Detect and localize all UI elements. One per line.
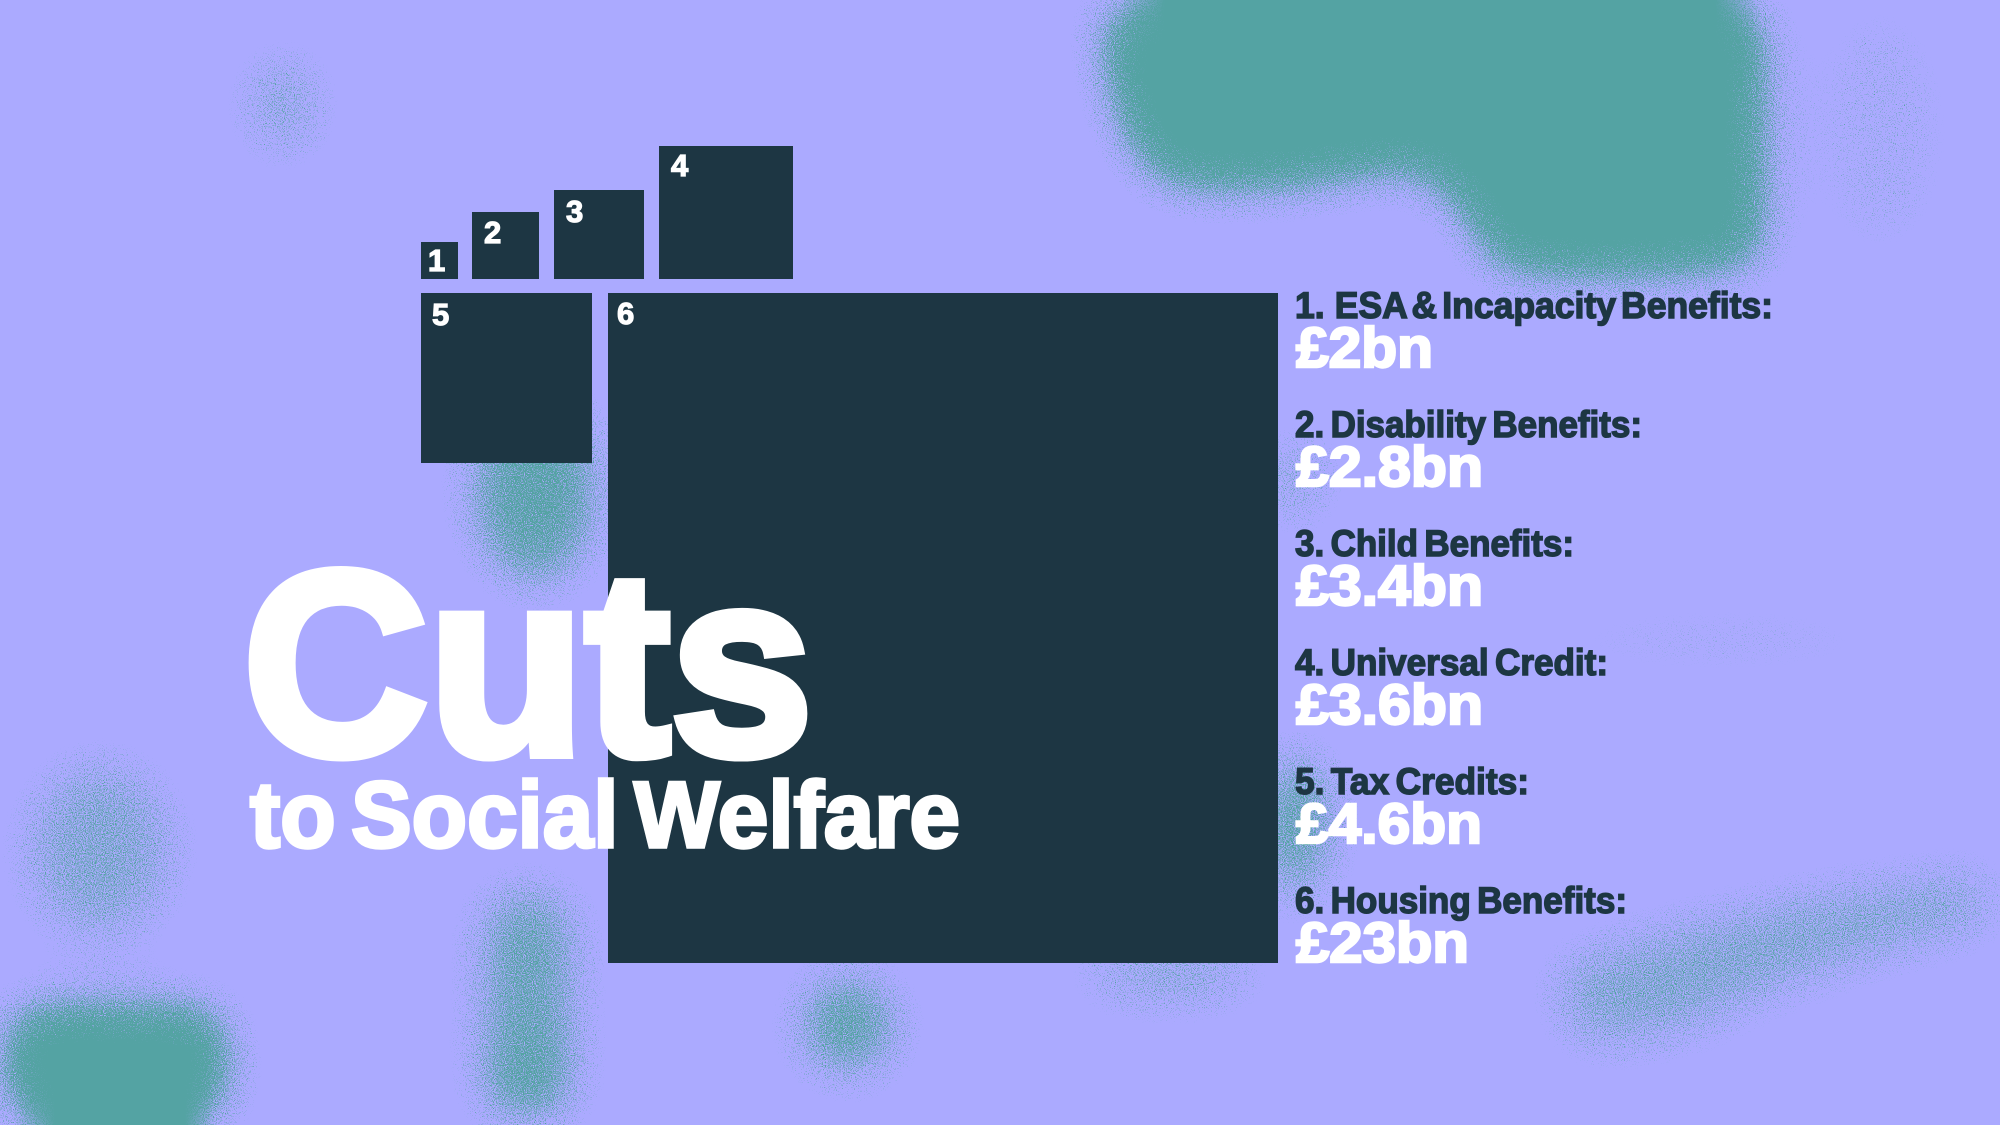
square 6: Housing Benefits — [608, 293, 1278, 963]
title — [243, 517, 960, 867]
square 6: Housing Benefits: 6 — [617, 296, 634, 331]
item 6 — [1295, 880, 1627, 975]
square 3: Child Benefits — [554, 190, 644, 279]
square 1: ESA and Incapacity Benefits — [421, 242, 458, 279]
item 5: £4.6bn — [1296, 792, 1482, 856]
item 2: 2. Disability Benefits: — [1295, 404, 1642, 445]
item 2 — [1295, 404, 1642, 499]
item 4: £3.6bn — [1296, 673, 1483, 737]
square 2: Disability Benefits — [472, 212, 539, 279]
item 3 — [1295, 523, 1574, 618]
item 2: £2.8bn — [1296, 435, 1483, 499]
square 5: Tax Credits — [421, 293, 592, 463]
subtitle: to Social Welfare: to Social Welfare — [250, 762, 960, 867]
item 1 — [1295, 285, 1773, 380]
item 1: 1. ESA & Incapacity Benefits: — [1295, 285, 1773, 326]
proportional squares chart — [421, 146, 1278, 963]
item 6: £23bn — [1296, 911, 1469, 975]
square 3: Child Benefits: 3 — [566, 194, 583, 229]
square 5: Tax Credits: 5 — [432, 297, 449, 332]
item 1: £2bn — [1296, 316, 1433, 380]
item 3: £3.4bn — [1296, 554, 1483, 618]
item 5 — [1295, 761, 1529, 856]
item 4 — [1295, 642, 1608, 737]
title: Cuts: Cuts — [243, 517, 813, 810]
square 4: Universal Credit: 4 — [671, 148, 689, 183]
item 4: 4. Universal Credit: — [1295, 642, 1608, 683]
legend list — [1295, 285, 1773, 975]
item 5: 5. Tax Credits: — [1295, 761, 1529, 802]
item 3: 3. Child Benefits: — [1295, 523, 1574, 564]
item 6: 6. Housing Benefits: — [1295, 880, 1627, 921]
square 1: ESA and Incapacity Benefits: 1 — [428, 243, 445, 278]
square 4: Universal Credit — [659, 146, 793, 279]
square 2: Disability Benefits: 2 — [484, 215, 501, 250]
